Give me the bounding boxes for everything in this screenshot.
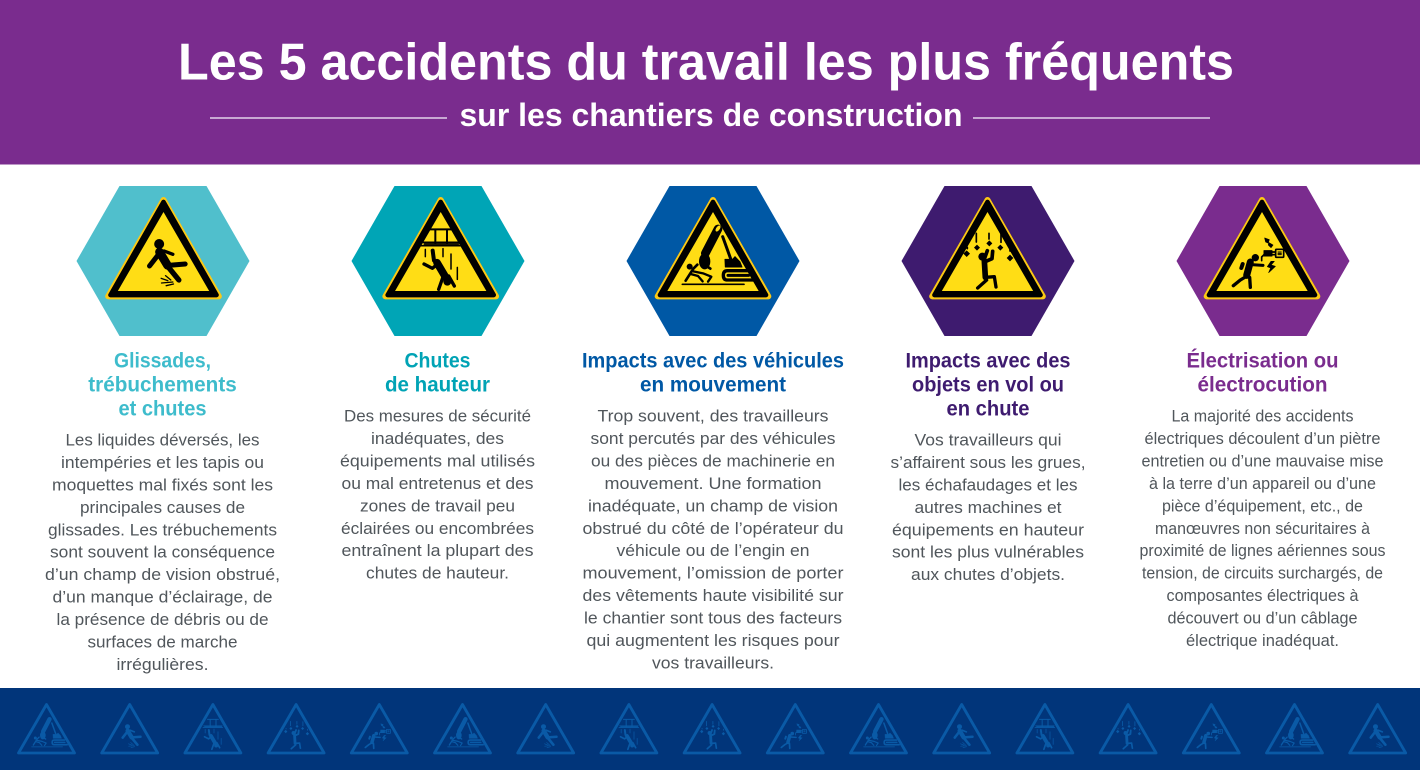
text: véhicules: qui augmentent les risques pour [586,631,840,650]
text: électrisation: La majorité des accidents [1172,407,1354,426]
text: glissades: d’un champ de vision obstrué, [45,565,280,584]
title: Les 5 accidents du travail les plus fréquents [178,34,1234,92]
text: électrisation: tension, de circuits surchargés, de [1142,564,1383,583]
text: objets: équipements en hauteur [892,520,1084,539]
heading: électrisation: électrocution [1198,374,1328,397]
icon: fall from height hexagon [352,186,524,336]
heading: électrisation [1186,350,1338,397]
text: objets: autres machines et [914,498,1062,517]
heading: glissades [88,350,237,421]
text: glissades [45,430,280,674]
text: électrisation: électriques découlent d’un piètre [1144,429,1380,448]
subtitle: sur les chantiers de construction [460,97,962,133]
text: électrisation: manœuvres non sécuritaires à [1155,519,1371,538]
text: véhicules: ou des pièces de machinerie en [591,452,835,470]
text: électrisation: entretien ou d’une mauvaise mise [1142,452,1384,470]
heading: véhicules: Impacts avec des véhicules [582,350,844,373]
text: électrisation: découvert ou d’un câblage [1168,608,1358,628]
text: chutes de hauteur: éclairées ou encombrées [341,519,534,538]
text: objets [890,430,1086,584]
icon: electric shock hexagon [1176,186,1350,336]
text: objets: aux chutes d’objets. [911,565,1065,584]
text: glissades: sont souvent la conséquence [50,543,275,562]
heading: glissades: Glissades, [114,350,211,373]
icon: vehicle impact hexagon [626,186,800,336]
icon: falling objects hexagon [902,186,1074,336]
heading: véhicules [582,350,844,397]
heading: chutes de hauteur: de hauteur [385,374,490,397]
header band [0,0,1420,164]
text: électrisation: proximité de lignes aériennes sous [1140,541,1386,560]
heading: objets: en chute [946,398,1030,421]
text: objets: sont les plus vulnérables [892,543,1084,562]
text: électrisation: à la terre d’un appareil ou d’une [1149,474,1376,493]
heading: objets [906,350,1070,421]
text: glissades: principales causes de [80,498,245,517]
panel: objets [890,186,1086,584]
text: électrisation: électrique inadéquat. [1186,631,1339,650]
text: véhicules: mouvement, l’omission de porter [582,564,844,583]
panel: glissades [45,186,280,674]
text: objets: les échafaudages et les [898,475,1078,494]
heading: électrisation: Électrisation ou [1186,350,1338,373]
text: véhicules: Trop souvent, des travailleurs [598,407,828,426]
heading: glissades: trébuchements [88,374,237,397]
text: chutes de hauteur: Des mesures de sécurité [344,407,531,426]
text: chutes de hauteur: équipements mal utilisés [340,452,535,470]
text: glissades: Les liquides déversés, les [66,430,260,450]
text: véhicules: vos travailleurs. [652,653,774,672]
text: électrisation: composantes électriques à [1166,586,1359,605]
text: chutes de hauteur: chutes de hauteur. [366,564,509,583]
text: glissades: moquettes mal fixés sont les [52,475,273,494]
text: véhicules [582,407,844,672]
panel: électrisation [1140,186,1386,650]
heading: glissades: et chutes [118,398,206,421]
text: chutes de hauteur: entraînent la plupart des [342,541,534,560]
text: chutes de hauteur [340,407,535,583]
text: électrisation: pièce d’équipement, etc., de [1162,496,1363,515]
text: chutes de hauteur: inadéquates, des [371,429,504,448]
text: véhicules: mouvement. Une formation [604,474,822,493]
text: glissades: glissades. Les trébuchements [48,520,277,539]
text: glissades: surfaces de marche [88,632,238,651]
heading: objets: Impacts avec des [906,350,1070,373]
heading: chutes de hauteur [385,350,490,397]
text: électrisation [1140,407,1386,650]
text: véhicules: inadéquate, un champ de vision [588,496,838,515]
text: glissades: irrégulières. [116,655,208,674]
panel: véhicules [582,186,844,672]
text: véhicules: le chantier sont tous des facteurs [584,608,842,628]
text: véhicules: des vêtements haute visibilité sur [582,586,844,605]
heading: objets: objets en vol ou [912,374,1064,397]
text: objets: s’affairent sous les grues, [890,453,1086,472]
text: véhicules: véhicule ou de l’engin en [616,541,810,560]
text: véhicules: obstrué du côté de l’opérateur du [582,519,844,538]
heading: véhicules: en mouvement [640,374,786,397]
text: chutes de hauteur: zones de travail peu [360,496,515,515]
panel: chutes de hauteur [340,186,535,583]
footer band with warning triangle pattern [0,688,1420,770]
text: glissades: d’un manque d’éclairage, de [52,588,272,607]
text: véhicules: sont percutés par des véhicules [590,429,836,448]
text: objets: Vos travailleurs qui [914,430,1062,450]
text: glissades: la présence de débris ou de [56,610,268,629]
icon: slip warning hexagon [76,186,250,336]
text: chutes de hauteur: ou mal entretenus et des [342,474,534,493]
text: glissades: intempéries et les tapis ou [61,453,264,472]
heading: chutes de hauteur: Chutes [404,350,470,373]
